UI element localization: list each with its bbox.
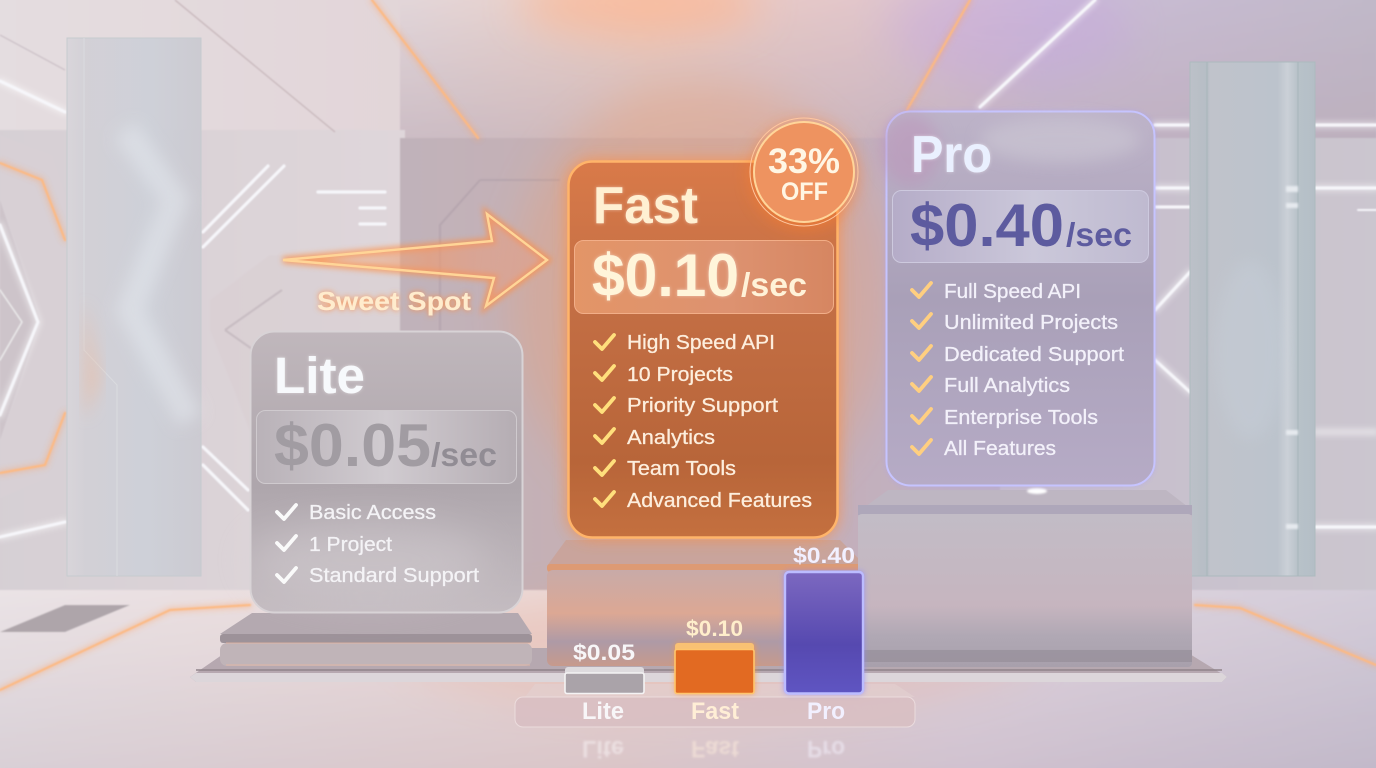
panel: Fast plan: [568, 161, 838, 538]
feature list: Fast: High Speed API: [627, 331, 775, 354]
glass base plate: [190, 648, 1227, 682]
bar: Fast: [675, 616, 755, 694]
feature list: Fast: Team Tools: [627, 457, 736, 480]
floor reflection of axis labels: [582, 735, 845, 762]
right glass pillar: [1190, 62, 1315, 576]
heading: Pro: Pro: [911, 126, 992, 184]
price box: Fast: [574, 240, 834, 314]
feature list: Pro: Full Speed API: [944, 280, 1081, 303]
pedestal: Fast: [547, 540, 867, 666]
bar: Lite: [565, 640, 644, 694]
panel: Lite plan: [250, 332, 522, 612]
feature list: Fast: [595, 331, 812, 512]
price box: Lite: /sec: [431, 436, 497, 473]
pedestal: Lite: [220, 613, 532, 666]
floor reflection of axis labels: Lite: [582, 735, 624, 762]
feature list: Fast: Advanced Features: [627, 489, 812, 512]
price box: Fast: $0.10: [592, 242, 739, 309]
bar: Fast: $0.10: [686, 616, 743, 641]
axis labels: Lite: [582, 698, 624, 725]
arrow: sweet spot pointer: [283, 214, 547, 306]
feature list: Fast: Analytics: [627, 426, 715, 449]
price box: Pro: /sec: [1066, 216, 1132, 253]
badge: 33% off: [750, 118, 858, 229]
bar: Pro: $0.40: [793, 543, 855, 568]
price box: Lite: [256, 410, 516, 484]
feature list: Fast: Priority Support: [627, 394, 778, 417]
bar: Pro: [784, 543, 864, 694]
price box: Pro: [892, 190, 1148, 262]
badge: 33% off: OFF: [781, 178, 828, 206]
axis labels: Fast: [691, 698, 739, 725]
chart shelf: [515, 684, 915, 727]
heading: Fast: Fast: [593, 177, 698, 235]
price box: Fast: /sec: [741, 266, 807, 303]
feature list: Pro: Full Analytics: [944, 374, 1070, 397]
price box: Pro: $0.40: [910, 192, 1064, 259]
price box: Lite: $0.05: [274, 412, 431, 479]
axis labels: Pro: [807, 698, 845, 725]
floor reflection of axis labels: Pro: [807, 735, 845, 762]
feature list: Lite: Standard Support: [309, 564, 479, 587]
callout: Sweet Spot: Sweet Spot: [317, 286, 471, 316]
axis labels: [582, 698, 845, 725]
feature list: Pro: Dedicated Support: [944, 343, 1124, 366]
feature list: Pro: [912, 280, 1124, 460]
heading: Lite: Lite: [274, 347, 365, 404]
feature list: Pro: All Features: [944, 437, 1056, 460]
feature list: Lite: [277, 501, 479, 587]
feature list: Fast: 10 Projects: [627, 363, 733, 386]
panel: Pro plan: [880, 111, 1155, 486]
floor reflection of axis labels: Fast: [691, 735, 739, 762]
left glass pillar: [67, 38, 201, 576]
bar: Lite: $0.05: [573, 640, 635, 665]
bar chart: price comparison: [565, 543, 864, 725]
feature list: Lite: 1 Project: [309, 533, 392, 556]
feature list: Pro: Unlimited Projects: [944, 311, 1118, 334]
feature list: Lite: Basic Access: [309, 501, 436, 524]
pedestal: Pro: [858, 488, 1192, 667]
badge: 33% off: 33%: [768, 142, 840, 181]
feature list: Pro: Enterprise Tools: [944, 406, 1098, 429]
